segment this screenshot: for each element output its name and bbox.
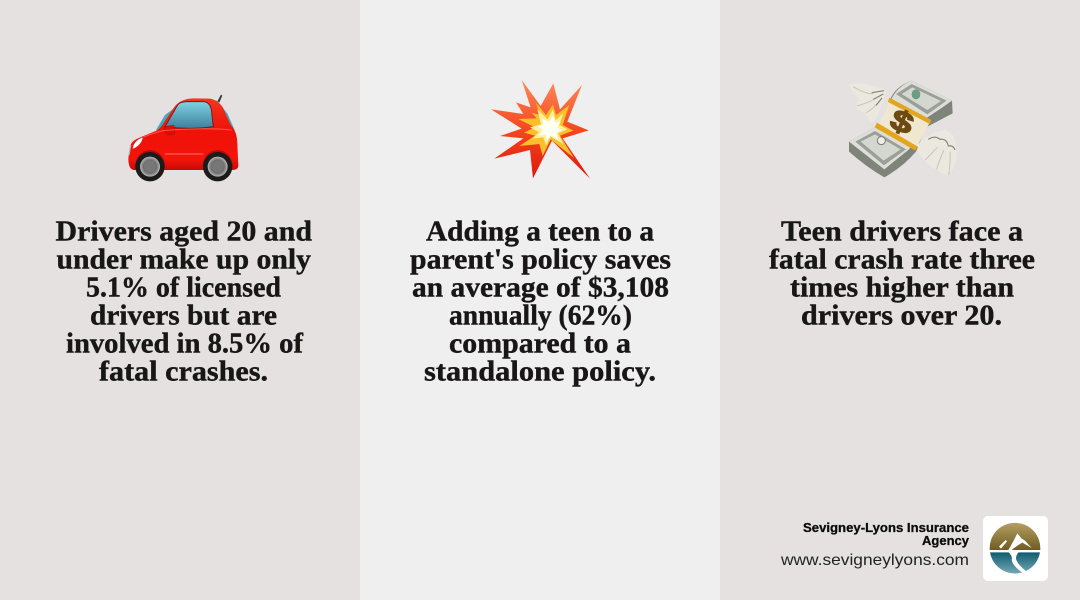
icon: red car <box>128 95 238 181</box>
agency name: Sevigney-Lyons Insurance <box>803 520 969 535</box>
text: young driver statistic: fatal crashes. <box>99 356 268 388</box>
text: young driver statistic: involved in 8.5% of <box>66 328 303 360</box>
text: parent's policy savings: compared to a <box>449 328 632 360</box>
agency name: Agency <box>922 533 970 548</box>
agency name <box>803 520 970 548</box>
text: young driver statistic: 5.1% of licensed <box>86 272 281 304</box>
text: fatal crash rate: times higher than <box>790 272 1014 304</box>
panel: parent's policy savings <box>360 0 720 600</box>
text: fatal crash rate: drivers over 20. <box>801 300 1002 332</box>
icon: agency logo <box>983 516 1048 581</box>
text: fatal crash rate: fatal crash rate three <box>769 244 1035 276</box>
icon: collision burst <box>491 80 590 179</box>
text: young driver statistic: Drivers aged 20 and <box>56 216 312 248</box>
text: parent's policy savings: parent's policy saves <box>410 244 671 276</box>
panel: fatal crash rate <box>720 0 1080 600</box>
agency website: www.sevigneylyons.com <box>780 552 969 569</box>
text: parent's policy savings: Adding a teen to a <box>426 216 654 248</box>
text: parent's policy savings: standalone policy. <box>424 356 656 388</box>
text: fatal crash rate <box>769 216 1035 332</box>
text: parent's policy savings: an average of $3,108 <box>412 272 669 304</box>
panel: young driver statistic <box>0 0 360 600</box>
text: young driver statistic: drivers but are <box>90 300 277 332</box>
icon: money with wings <box>849 81 956 177</box>
text: parent's policy savings <box>410 216 671 388</box>
text: young driver statistic <box>56 216 312 388</box>
text: fatal crash rate: Teen drivers face a <box>781 216 1024 248</box>
icon: money with wings: $ <box>886 103 918 141</box>
text: young driver statistic: under make up only <box>56 244 311 276</box>
text: parent's policy savings: annually (62%) <box>449 300 632 332</box>
